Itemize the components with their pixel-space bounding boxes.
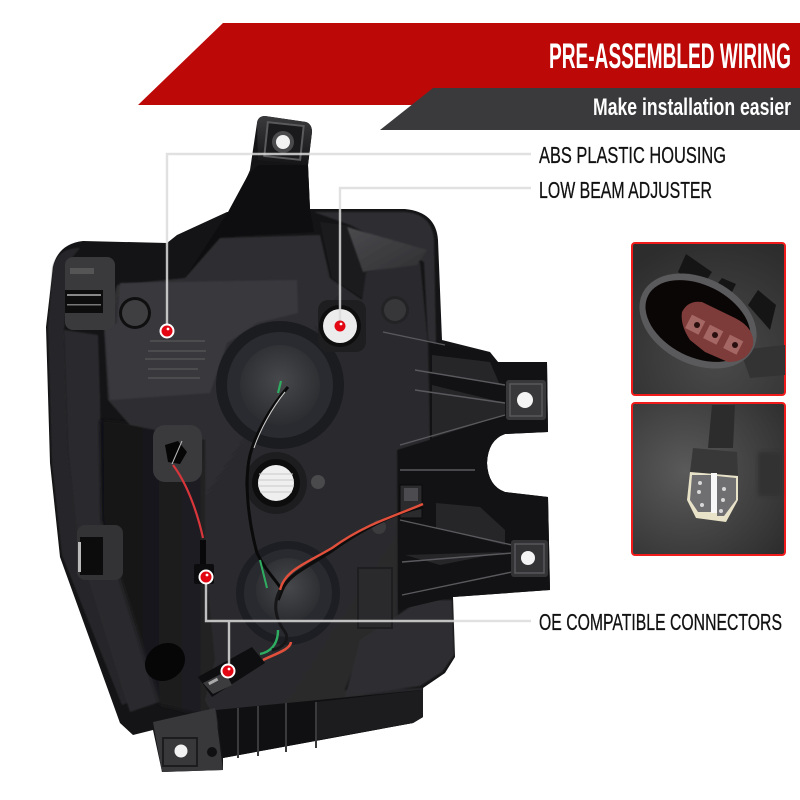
headlight housing rear view <box>46 116 550 772</box>
upper screw block <box>506 380 546 420</box>
upper bulb dust cap <box>216 321 344 449</box>
marker: adjuster <box>334 320 346 332</box>
wire: red from grommet <box>173 465 203 538</box>
photo panel: connector plug <box>623 243 785 395</box>
marker: lower connector <box>220 664 236 678</box>
left lower clip plate <box>77 525 123 580</box>
wire: white highlight <box>254 392 285 448</box>
housing silhouette <box>46 116 550 772</box>
wire: green upper <box>278 381 281 393</box>
bracket ribs <box>383 332 512 595</box>
lower screw block <box>511 540 548 577</box>
dimple <box>137 635 193 689</box>
small knob <box>311 475 325 489</box>
leader: OE connectors <box>206 578 531 670</box>
right mounting bracket <box>398 343 550 610</box>
low beam adjuster <box>318 300 366 352</box>
round plug right <box>381 296 409 324</box>
leader: ABS housing <box>167 154 531 330</box>
connector shell <box>623 255 773 387</box>
wire: black twist to connector <box>272 590 287 650</box>
wire: green to connector <box>260 630 278 654</box>
leader lines <box>167 154 531 670</box>
heat shrink <box>690 448 738 476</box>
upper reflector surface <box>347 227 427 272</box>
connector red terminals <box>682 302 753 362</box>
wire: green lower <box>260 560 267 588</box>
bracket light panels <box>405 355 505 565</box>
wire: red black twist <box>278 504 423 600</box>
top mounting arm <box>185 165 314 282</box>
banner: dark subtitle band <box>380 88 800 130</box>
connector body behind shell <box>740 345 785 378</box>
connector opening <box>632 264 764 378</box>
leader: low beam adjuster <box>340 188 531 325</box>
connector latches <box>678 254 776 330</box>
photo panel: LED chip <box>632 403 785 555</box>
left rim strip <box>48 248 135 705</box>
bottom fins <box>216 690 423 758</box>
embossed label text patch <box>145 340 206 379</box>
label: low beam adjuster: LOW BEAM ADJUSTER <box>539 177 712 203</box>
banner: red title band <box>138 23 800 105</box>
left upper clip plate <box>65 257 115 330</box>
embossed rectangle <box>358 568 392 628</box>
wire: red to connector <box>263 642 291 660</box>
lower knob <box>372 520 386 534</box>
dark recess under ledge <box>320 222 366 298</box>
marker: small connector <box>198 570 214 584</box>
label: ABS plastic housing: ABS PLASTIC HOUSING <box>539 142 726 168</box>
left grommet <box>153 425 202 482</box>
left inner wall <box>64 330 165 712</box>
bottom mounting tab <box>153 708 223 772</box>
small inline connector <box>194 540 214 584</box>
high beam adjuster hole <box>245 452 307 514</box>
left label plate <box>105 280 298 400</box>
wire stem <box>708 405 735 448</box>
top mounting tab <box>257 116 312 165</box>
lower left inner panel <box>100 420 225 715</box>
round plug left <box>119 297 151 329</box>
central body <box>104 235 430 730</box>
lower right flat panel <box>345 600 454 697</box>
lower bulb dust cap <box>236 541 340 645</box>
shadow blob <box>758 452 782 496</box>
marker: housing <box>160 324 174 338</box>
wire: black from upper cap <box>247 387 288 590</box>
side clip on bracket <box>400 485 422 518</box>
lower inline connector <box>198 647 265 697</box>
LED circuit board <box>687 472 738 522</box>
top right upper ledge <box>314 212 436 345</box>
